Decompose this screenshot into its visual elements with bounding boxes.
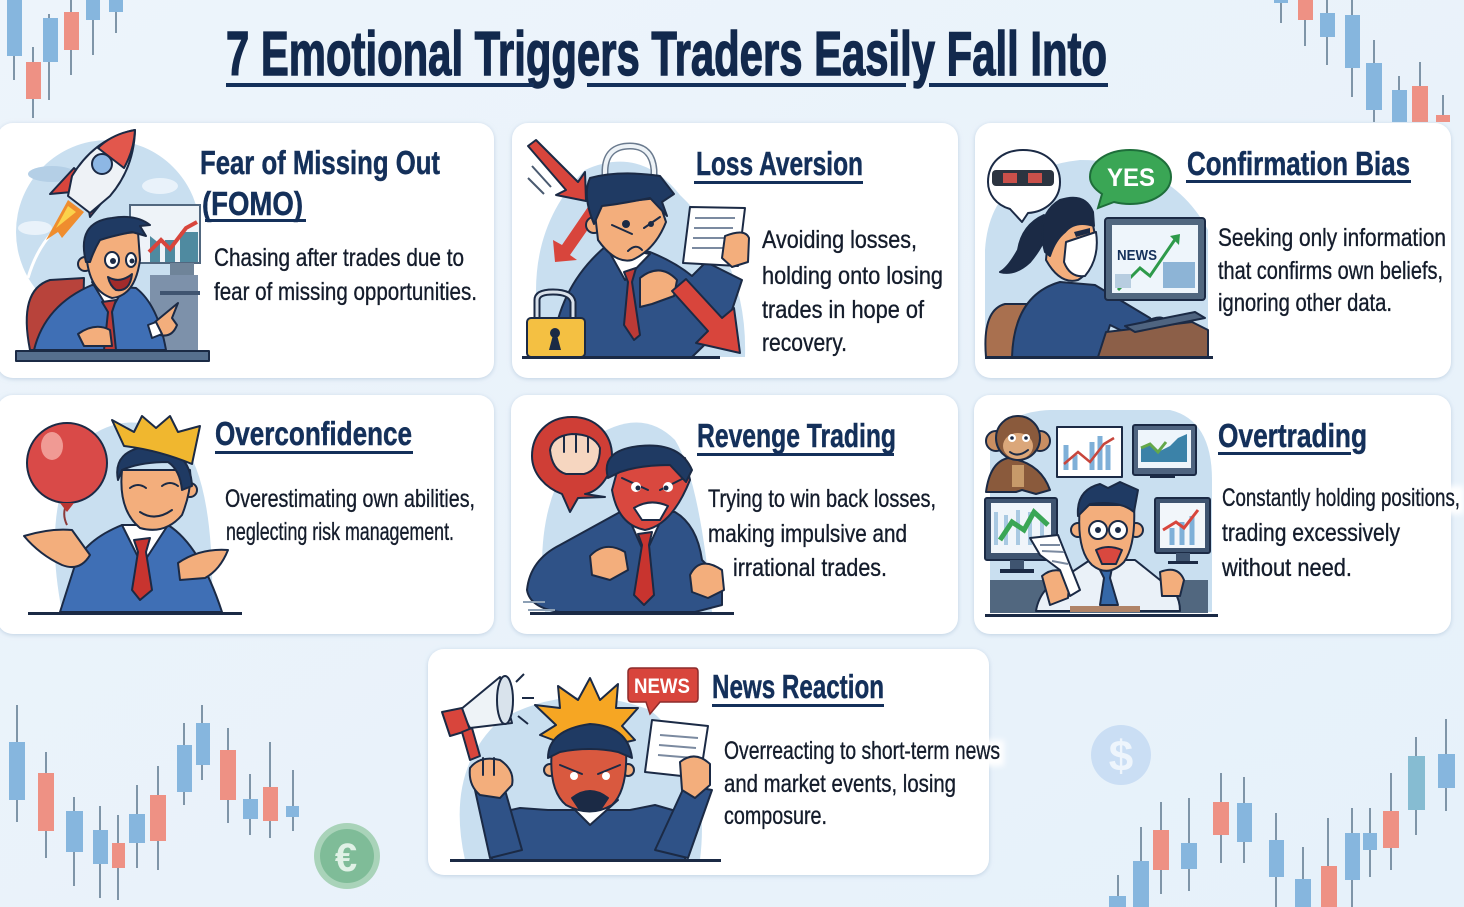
text: News Reaction description: and market events, losing — [724, 770, 956, 798]
text: Loss Aversion description: recovery. — [762, 329, 847, 357]
NEWS tag: NEWS — [634, 675, 690, 698]
text: Revenge Trading description: irrational trades. — [733, 554, 887, 582]
man in navy suit — [553, 173, 749, 357]
illustration: FOMO trader with rocket — [16, 130, 209, 361]
text: Loss Aversion description — [762, 226, 943, 357]
heading: Overconfidence: Overconfidence — [215, 415, 412, 452]
chair — [985, 304, 1048, 357]
illustration: overconfident trader — [24, 416, 242, 615]
desk — [1098, 322, 1208, 357]
panel: Loss Aversion — [512, 123, 958, 378]
padlock shackle behind head — [605, 146, 654, 184]
illustration: confirmation bias trader — [985, 150, 1213, 359]
background candlesticks: top left — [7, 0, 123, 118]
heading: Fear of Missing Out (FOMO): (FOMO) — [202, 185, 303, 222]
text: FOMO description: Chasing after trades due to — [214, 244, 464, 272]
icon: euro coin: € — [335, 836, 357, 880]
background candlesticks: bottom right — [1109, 719, 1455, 907]
man in navy suit — [527, 446, 724, 612]
monitor with NEWS — [1105, 218, 1205, 300]
background candlesticks: top right — [1274, 0, 1450, 122]
icon: dollar coin: $ — [1109, 732, 1133, 781]
text: Overconfidence description — [225, 485, 475, 546]
text: Loss Aversion description: holding onto losing — [762, 262, 943, 290]
YES bubble — [1090, 150, 1171, 208]
person with mask — [1000, 198, 1166, 357]
heading: Confirmation Bias: Confirmation Bias — [1187, 145, 1410, 182]
falling arrows — [528, 140, 600, 262]
monkey — [986, 416, 1050, 494]
monitor: left — [985, 498, 1057, 573]
red balloon — [27, 423, 107, 525]
keyboard — [1125, 312, 1205, 332]
text: Revenge Trading description: Trying to win back losses, — [708, 485, 936, 513]
chart: top center — [1057, 427, 1122, 477]
text: Loss Aversion description: trades in hope of — [762, 296, 924, 324]
chair — [27, 278, 84, 350]
heading: Fear of Missing Out (FOMO) — [200, 144, 440, 222]
padlock — [527, 292, 585, 357]
panel: Confirmation Bias — [975, 123, 1451, 378]
man in blue suit — [34, 217, 178, 350]
monitor: right — [1155, 498, 1210, 564]
icon: dollar coin — [1091, 725, 1151, 785]
text: FOMO description: fear of missing opportunities. — [214, 278, 477, 306]
illustration: revenge trader — [523, 417, 734, 615]
heading: Fear of Missing Out (FOMO): Fear of Missing Out — [200, 144, 440, 181]
panel: News Reaction — [428, 649, 1004, 875]
text: Overtrading description — [1221, 484, 1460, 582]
panel: Revenge Trading — [511, 395, 958, 634]
desk — [16, 351, 209, 361]
gold crown — [112, 416, 200, 464]
heading: Loss Aversion: Loss Aversion — [696, 145, 863, 182]
text: Overtrading description: without need. — [1221, 554, 1352, 582]
text: Overconfidence description: neglecting risk management. — [226, 518, 454, 546]
panel: Fear of Missing Out — [0, 123, 494, 378]
large red down arrow — [672, 279, 740, 353]
YES bubble: YES — [1107, 164, 1155, 192]
icon: euro coin — [314, 823, 380, 889]
text: News Reaction description — [724, 737, 1000, 830]
text: News Reaction description: composure. — [724, 802, 827, 830]
monitor with chart — [130, 205, 200, 295]
rocket — [28, 130, 135, 278]
man in navy sweater — [470, 720, 712, 860]
megaphone — [442, 674, 534, 760]
explosion — [535, 678, 638, 752]
text: Overtrading description: trading excessively — [1222, 519, 1400, 547]
panel: Overconfidence — [0, 395, 494, 634]
text: FOMO description — [214, 244, 477, 306]
man in white shirt — [1030, 482, 1184, 611]
text: Revenge Trading description — [708, 485, 936, 582]
illustration: loss averse trader — [522, 140, 749, 359]
text: Overconfidence description: Overestimating own abilities, — [225, 485, 475, 513]
NEWS tag — [628, 668, 698, 714]
monitor with NEWS: NEWS — [1117, 247, 1157, 264]
text: Revenge Trading description: making impulsive and — [708, 520, 907, 548]
text: News Reaction description: Overreacting to short-term news — [724, 737, 1000, 765]
monitor: top right — [1133, 425, 1196, 478]
text: Loss Aversion description: Avoiding losses, — [762, 226, 917, 254]
heading: Revenge Trading: Revenge Trading — [697, 417, 896, 454]
text: Confirmation Bias description — [1218, 224, 1446, 317]
heading: Overtrading: Overtrading — [1218, 417, 1367, 454]
speech bubble with redacted bar — [988, 150, 1060, 222]
panel: Overtrading — [974, 395, 1464, 634]
background candlesticks: bottom left — [9, 705, 299, 900]
illustration: overtrading trader — [985, 410, 1218, 617]
heading: News Reaction: News Reaction — [712, 668, 884, 705]
text: Confirmation Bias description: ignoring other data. — [1218, 289, 1392, 317]
speech bubble with fist — [532, 417, 612, 512]
illustration: news reaction trader — [442, 668, 721, 862]
man in blue suit — [24, 446, 228, 612]
